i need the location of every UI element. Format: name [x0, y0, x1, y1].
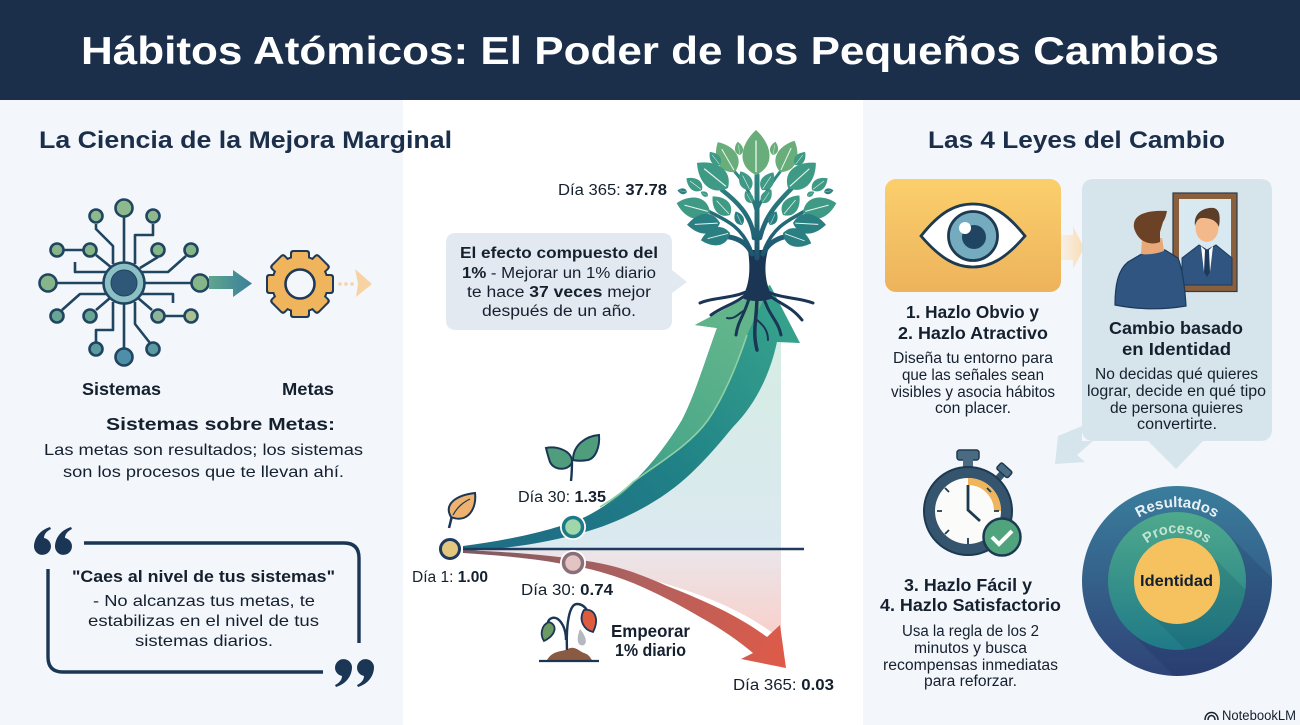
icon: sprout — [546, 435, 599, 481]
text: laws 1 and 2: con placer. — [935, 400, 1011, 417]
card: identity: No decidas qué quieres — [1095, 366, 1258, 383]
text: laws 3 and 4: recompensas inmediatas — [883, 657, 1058, 674]
icon: opening quote — [34, 527, 72, 555]
logo: notebooklm: NotebookLM — [1222, 708, 1296, 723]
label: empeorar: 1% diario — [615, 640, 686, 660]
callout: quote: sistemas diarios. — [135, 633, 273, 650]
panel: compound effect chart — [412, 130, 839, 694]
text: laws 3 and 4: Usa la regla de los 2 — [902, 623, 1039, 640]
card: identity: lograr, decide en qué tipo — [1087, 383, 1266, 400]
text: laws 3 and 4: para reforzar. — [924, 673, 1017, 690]
text: laws 1 and 2: 1. Hazlo Obvio y — [906, 302, 1039, 322]
label: day 365 down: Día 365: 0.03 — [733, 677, 834, 694]
text: laws 3 and 4 — [880, 575, 1061, 690]
chart: area above decline curve — [463, 549, 781, 640]
chart: concentric circles: Resultados — [1134, 496, 1218, 518]
icon: seed leaf — [449, 493, 475, 528]
card: eye — [885, 179, 1061, 292]
heading: right panel: Las 4 Leyes del Cambio — [928, 127, 1225, 154]
text: laws 1 and 2: que las señales sean — [902, 367, 1044, 384]
chart: decline arrow — [463, 550, 786, 668]
text: sistemas sobre metas: Sistemas sobre Metas: — [106, 414, 335, 434]
label: day 365 up: Día 365: 37.78 — [558, 182, 667, 199]
chart: point day 30 up — [560, 514, 586, 540]
panel: la ciencia de la mejora marginal — [34, 127, 452, 687]
title banner: Hábitos Atómicos: El Poder de los Pequeños Cambios — [81, 30, 1219, 73]
callout: compound effect: 1% - Mejorar un 1% diario — [462, 265, 656, 282]
icon: wilted plant — [539, 604, 599, 661]
arrow: faded dotted — [338, 269, 372, 297]
icon: mirror and person — [1115, 193, 1237, 309]
text: laws 3 and 4: 4. Hazlo Satisfactorio — [880, 595, 1061, 615]
label: day 30 down: Día 30: 0.74 — [521, 582, 613, 599]
chart: point day 1 — [440, 540, 460, 558]
leaves — [742, 130, 770, 175]
card: identity: convertirte. — [1137, 416, 1217, 433]
label: sistemas: Sistemas — [82, 379, 161, 399]
label: day 30 up: Día 30: 1.35 — [518, 489, 606, 506]
roots — [700, 285, 813, 350]
callout: compound effect: te hace 37 veces mejor — [467, 284, 651, 301]
card: identity — [1082, 179, 1272, 469]
text: sistemas sobre metas: Las metas son resultados; los sistemas — [44, 442, 363, 459]
card: identity: Cambio basado — [1109, 318, 1243, 338]
icon: stopwatch — [924, 450, 1020, 556]
trunk — [742, 250, 773, 301]
label: empeorar — [611, 621, 690, 660]
label: day 1: Día 1: 1.00 — [412, 569, 488, 586]
chart: baseline — [463, 548, 804, 550]
chart: area under growth curve — [463, 342, 781, 549]
chart: concentric circles — [1082, 486, 1272, 676]
text: laws 3 and 4: 3. Hazlo Fácil y — [904, 575, 1032, 595]
icon: eye — [921, 204, 1025, 267]
card: identity: de persona quieres — [1110, 400, 1243, 417]
callout: compound effect: después de un año. — [482, 303, 636, 320]
text: laws 1 and 2: visibles y asocia hábitos — [891, 384, 1055, 401]
icon: systems circuit — [40, 200, 208, 366]
arrow: systems to goals — [209, 270, 252, 297]
callout: compound effect — [446, 233, 687, 330]
label: empeorar: Empeorar — [611, 621, 690, 641]
text: sistemas sobre metas — [44, 414, 363, 481]
panel: las 4 leyes del cambio — [880, 127, 1272, 690]
chart: concentric circles: Identidad — [1140, 573, 1213, 590]
text: laws 1 and 2 — [891, 302, 1055, 417]
callout: quote: - No alcanzas tus metas, te — [93, 593, 315, 610]
chart: point day 30 down — [560, 550, 586, 576]
chart: concentric circles: Procesos — [1142, 525, 1210, 543]
arrow: faded to identity card — [1061, 226, 1084, 269]
icon: gear — [266, 250, 334, 318]
title banner — [0, 0, 1300, 100]
icon: closing quote — [335, 659, 374, 687]
text: laws 1 and 2: 2. Hazlo Atractivo — [898, 323, 1048, 343]
callout: quote: estabilizas en el nivel de tus — [88, 613, 319, 630]
text: laws 1 and 2: Diseña tu entorno para — [893, 350, 1053, 367]
label: metas: Metas — [282, 379, 334, 399]
callout: quote: "Caes al nivel de tus sistemas" — [72, 567, 335, 586]
arrow: identity to laws 3 and 4 — [1055, 426, 1093, 464]
card: identity: en Identidad — [1122, 339, 1231, 359]
icon: tree — [674, 130, 839, 350]
text: laws 3 and 4: minutos y busca — [914, 640, 1027, 657]
callout: quote — [34, 527, 374, 687]
text: sistemas sobre metas: son los procesos que te llevan ahí. — [63, 464, 344, 481]
heading: left panel: La Ciencia de la Mejora Marginal — [39, 127, 452, 154]
chart: growth arrow — [463, 285, 800, 551]
callout: compound effect: El efecto compuesto del — [460, 245, 658, 262]
